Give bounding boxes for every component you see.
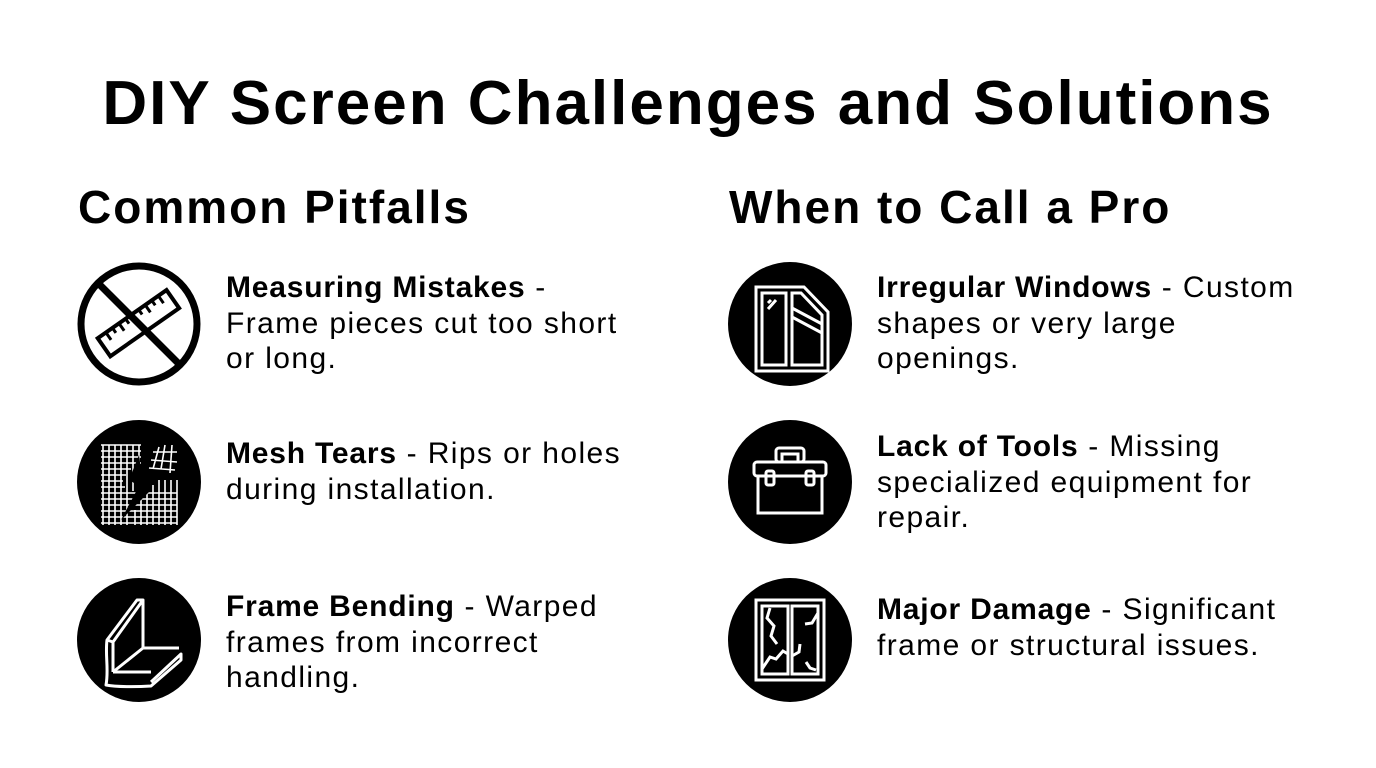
icon: mesh tear [77,420,201,544]
text: major damage: Major Damage - Significant frame or structural issues. [877,593,1276,662]
text: measuring mistakes: Measuring Mistakes - Frame pieces cut too short or long. [226,271,618,375]
heading: when to call a pro: When to Call a Pro [729,181,1171,233]
text: lack of tools: Lack of Tools - Missing specialized equipment for repair. [877,430,1252,534]
title: DIY Screen Challenges and Solutions [102,69,1274,138]
icon: toolbox [728,420,852,544]
text: irregular windows: Irregular Windows - Custom shapes or very large openings. [877,271,1295,375]
text: frame bending: Frame Bending - Warped frames from incorrect handling. [226,590,598,694]
icon: no ruler [78,262,200,386]
heading: common pitfalls: Common Pitfalls [78,181,471,233]
icon: broken window [728,578,852,702]
icon: irregular window [728,262,852,386]
icon: bent frame [77,578,201,702]
text: mesh tears: Mesh Tears - Rips or holes during installation. [226,437,621,506]
